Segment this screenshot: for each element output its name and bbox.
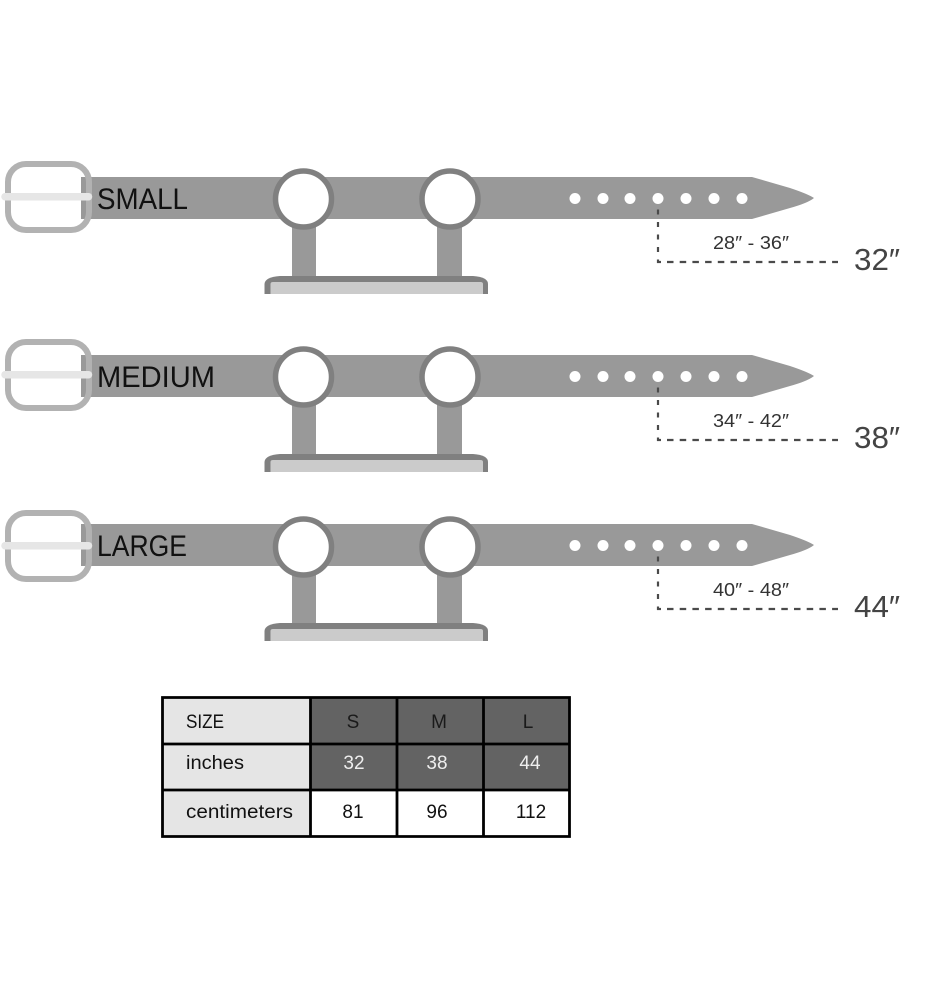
belt: large [5, 513, 900, 641]
dashed leader [657, 556, 838, 610]
size table [162, 698, 570, 836]
size letters: L [523, 712, 533, 733]
row labels: inches [186, 753, 244, 774]
inch values: 44 [519, 753, 541, 774]
label column background [162, 698, 310, 836]
row labels: centimeters [186, 802, 293, 823]
size range: 28″ - 36″ [713, 233, 790, 253]
dashed leader [657, 388, 838, 441]
size letters: S [347, 712, 359, 733]
belt holes [570, 193, 748, 204]
centimeter values [342, 802, 546, 823]
belt: medium [5, 342, 900, 472]
size label: LARGE [97, 530, 187, 563]
inch values [343, 753, 541, 774]
nominal size: 44″ [854, 589, 900, 624]
belt strap [81, 177, 814, 219]
inch values: 38 [426, 753, 448, 774]
size letters [347, 712, 533, 733]
nominal size: 38″ [854, 420, 900, 455]
belt stand [264, 623, 488, 641]
belt stand [264, 276, 488, 294]
centimeter values: 96 [426, 802, 448, 823]
size range: 40″ - 48″ [713, 580, 790, 600]
inch values: 32 [343, 753, 365, 774]
size range: 34″ - 42″ [713, 411, 790, 431]
belt strap [81, 524, 814, 566]
buckle [5, 342, 89, 408]
centimeter values: 112 [516, 802, 546, 823]
loops [276, 519, 478, 575]
nominal size: 32″ [854, 242, 900, 277]
belt holes [570, 540, 748, 551]
size letters: M [431, 712, 447, 733]
loops [276, 349, 478, 405]
table grid [162, 698, 570, 836]
buckle [5, 164, 89, 230]
belt strap [81, 355, 814, 397]
belt: small [5, 164, 900, 294]
loops [276, 171, 478, 227]
size label: MEDIUM [97, 361, 215, 394]
row labels: SIZE [186, 712, 224, 733]
belt stand [264, 454, 488, 472]
dark header cells [310, 698, 570, 789]
size label: SMALL [97, 183, 188, 216]
centimeter values: 81 [342, 802, 364, 823]
belt posts [292, 220, 462, 280]
belt posts [292, 398, 462, 458]
belt posts [292, 567, 462, 627]
row labels [186, 712, 293, 823]
belt holes [570, 371, 748, 382]
dashed leader [657, 210, 838, 263]
buckle [5, 513, 89, 579]
